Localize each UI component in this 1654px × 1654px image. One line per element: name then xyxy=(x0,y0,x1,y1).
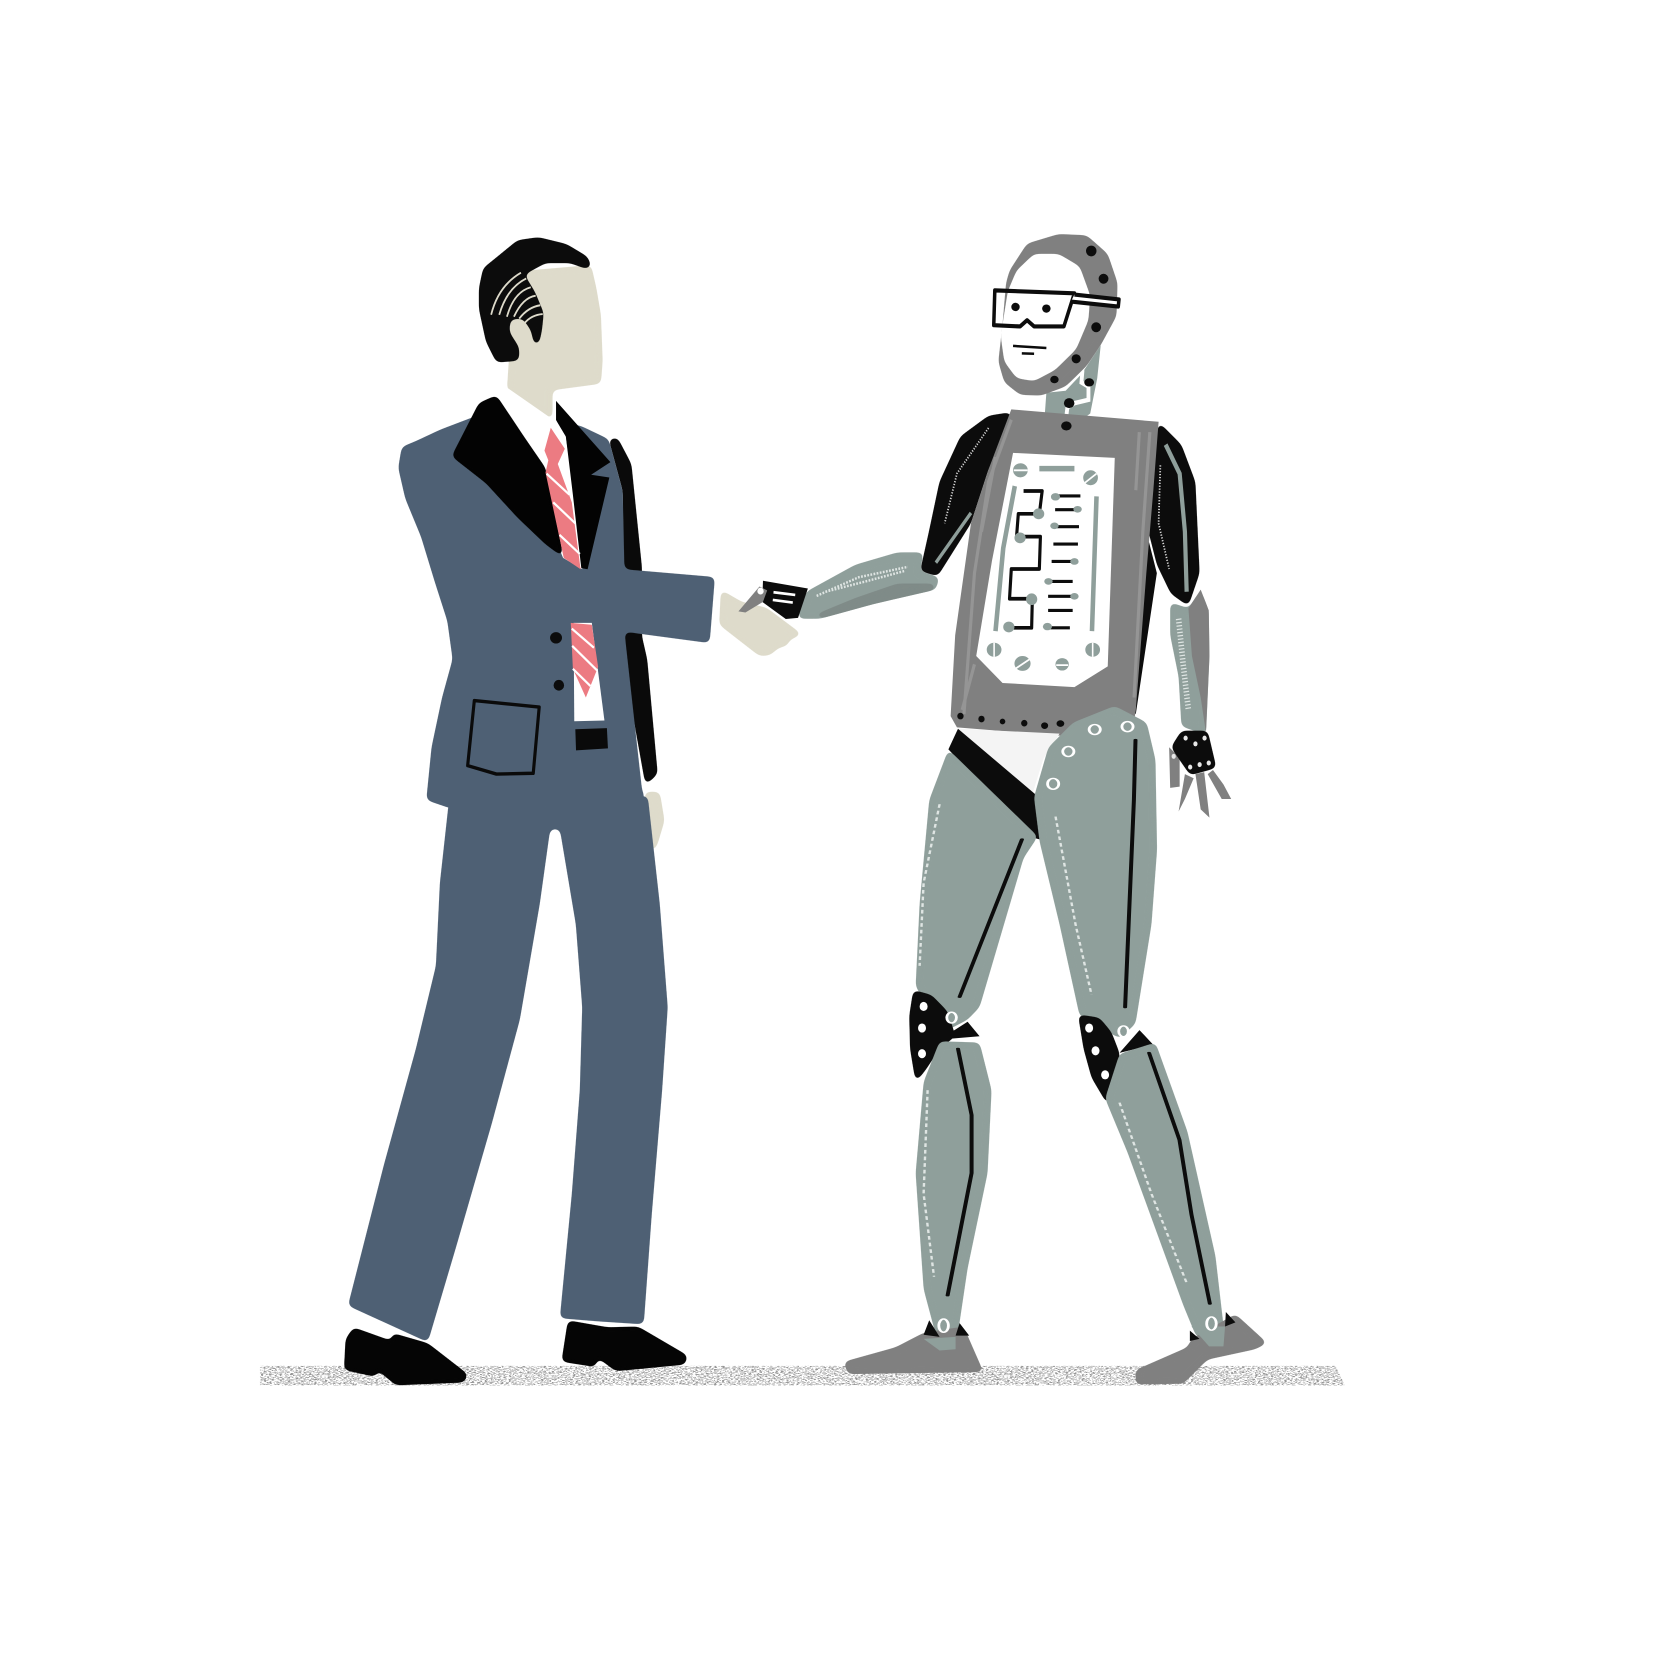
figure: robot upper body xyxy=(797,234,1231,818)
teal lines xyxy=(996,469,1097,631)
underwear xyxy=(958,729,1060,797)
necktie upper xyxy=(544,428,581,569)
head and neck xyxy=(507,265,603,420)
trousers xyxy=(348,796,668,1342)
hair xyxy=(479,237,592,363)
necktie lower xyxy=(571,623,598,698)
belt xyxy=(575,728,608,750)
rear foot xyxy=(844,1320,984,1374)
torso rivets xyxy=(957,713,1064,729)
left lapel xyxy=(452,395,564,558)
figure: businessman legs and shoes xyxy=(344,792,688,1385)
rear knee xyxy=(909,990,956,1083)
front thigh xyxy=(1034,706,1157,1038)
circuit traces xyxy=(1010,491,1042,628)
front foot xyxy=(1136,1312,1267,1385)
helmet dots xyxy=(1050,246,1108,430)
teal nodes xyxy=(987,463,1100,671)
leg lines xyxy=(948,740,1210,1304)
shirt lower panel xyxy=(574,623,604,721)
right shoulder xyxy=(1146,422,1200,606)
chest circuit panel xyxy=(976,453,1115,687)
front knee band xyxy=(1120,1030,1153,1053)
helmet xyxy=(998,234,1118,396)
rear lower leg xyxy=(916,1041,992,1349)
eyes and mouth xyxy=(1011,303,1051,354)
left shoulder xyxy=(920,412,1012,576)
torso side strip xyxy=(1131,469,1157,714)
hanging hand xyxy=(645,792,665,855)
figure: robot legs xyxy=(844,706,1267,1385)
leg scuffs xyxy=(920,804,1187,1285)
glasses xyxy=(994,290,1119,326)
rear knee band xyxy=(940,1022,980,1040)
rear thigh xyxy=(916,749,1038,1032)
left forearm xyxy=(797,552,939,619)
torso xyxy=(951,409,1159,736)
suit jacket xyxy=(398,414,715,808)
coat back panel xyxy=(609,437,658,786)
front knee xyxy=(1078,1014,1120,1105)
figure: businessman upper body xyxy=(398,237,802,808)
neck xyxy=(1043,345,1101,441)
face xyxy=(1001,254,1090,381)
knee dots xyxy=(918,1002,1109,1079)
hair comb lines xyxy=(491,273,543,323)
ground: speckled grey strip xyxy=(260,1366,1345,1385)
robot hand gripping xyxy=(738,581,808,619)
screw slots xyxy=(994,470,1097,668)
joint rivets xyxy=(939,722,1216,1332)
right wrist glove xyxy=(1171,731,1216,775)
jacket pocket xyxy=(468,701,539,774)
hand shaking xyxy=(719,590,802,656)
right hand fingers xyxy=(1169,747,1231,818)
bars xyxy=(1048,496,1080,628)
jacket buttons xyxy=(550,632,564,691)
left shoe xyxy=(344,1327,468,1385)
front lower leg xyxy=(1105,1043,1225,1346)
shirt collar and front xyxy=(496,388,582,569)
right shoe xyxy=(561,1320,688,1371)
right forearm xyxy=(1170,590,1209,735)
hip band xyxy=(948,729,1040,839)
right lapel xyxy=(556,401,610,569)
